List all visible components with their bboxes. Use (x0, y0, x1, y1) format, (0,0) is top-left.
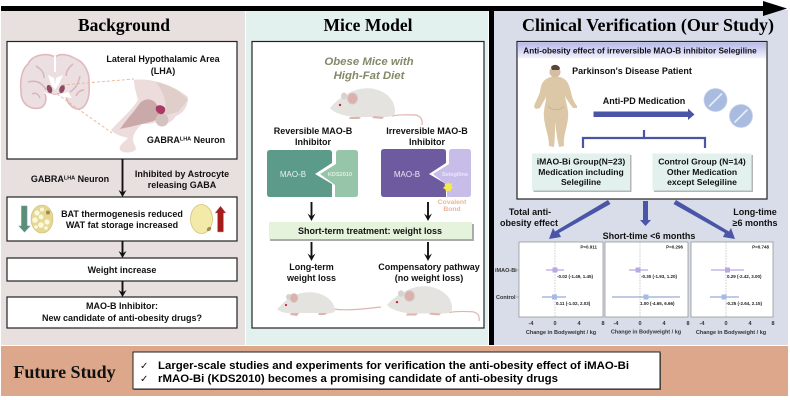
label: long-term: Long-term (289, 262, 334, 272)
label: inhibited by astrocyte: Inhibited by Astrocyte (135, 169, 229, 179)
arrow: medication (594, 108, 694, 120)
box: iMAO-Bi group: Selegiline (561, 177, 601, 187)
diagram: reversible inhibitor KDS2010: KDS2010 (328, 172, 352, 178)
forest plot: long-time: P=0.748 (752, 244, 769, 250)
box: iMAO-Bi group: Medication including (538, 167, 624, 177)
box: mice experiment (252, 42, 484, 328)
box: anti-obesity effect (517, 42, 767, 199)
label: GABRA LHA Neuron: Neuron (191, 135, 225, 145)
icon: patient figure (534, 65, 577, 147)
label: total effect: Total anti- (509, 207, 551, 217)
label: long-time: ≥6 months (733, 218, 777, 228)
forest plot: total: P=0.911 (580, 244, 597, 250)
box: control group (652, 154, 753, 192)
label: long-time (733, 207, 777, 228)
diagram: reversible inhibitor KDS2010: MAO-B (280, 170, 306, 179)
icon: coronal brain section (21, 55, 89, 109)
diagram: irreversible inhibitor Selegiline (381, 149, 471, 197)
box: brain anatomy (7, 42, 237, 159)
arrow: to long-time (674, 200, 735, 239)
label: covalent bond (438, 199, 467, 213)
label: covalent bond: Bond (443, 206, 461, 213)
arrow: to total effect (549, 200, 610, 239)
forest plot: total: Control (496, 295, 516, 301)
box: weight increase: Weight increase (88, 265, 156, 275)
arrow (118, 241, 126, 258)
forest plot: total: 4 (577, 321, 581, 327)
forest plot: total: 0.11 (-1.02, 2.03) (556, 301, 591, 306)
arrow (308, 242, 316, 261)
box: control group: except Selegiline (667, 177, 737, 187)
forest plot: long-time (691, 242, 775, 336)
forest plot: total (495, 242, 605, 336)
label: inhibited by astrocyte: releasing GABA (148, 180, 217, 190)
forest plot: total: -0.02 (-1.49, 1.45) (557, 274, 594, 279)
forest plot: total: iMAO-Bi (495, 268, 517, 274)
box: future study points (133, 352, 661, 390)
panel: mice model (246, 10, 488, 345)
forest plot: short-time: P=0.296 (666, 244, 683, 250)
forest plot: long-time: -0.25 (-2.64, 2.15) (726, 301, 763, 306)
label: Lateral Hypothalamic Area (106, 54, 221, 76)
forest plot: long-time: 0.29 (-2.42, 3.00) (727, 274, 762, 279)
box: future study points: rMAO-Bi (KDS2010) becomes a promising candidate of anti-obesity drugs (158, 373, 558, 385)
label: obese mice: Obese Mice with (324, 56, 414, 68)
arrow (118, 281, 126, 297)
forest plot: total: -4 (529, 321, 534, 327)
arrow: to short-time (640, 201, 651, 226)
box: thermogenesis (7, 197, 237, 241)
label: irreversible: Inhibitor (409, 137, 445, 147)
label: short-time: Short-time <6 months (603, 231, 695, 241)
diagram: reversible inhibitor KDS2010 (267, 150, 358, 197)
forest plot: long-time: 4 (748, 321, 752, 327)
text: thermogenesis (61, 209, 183, 230)
label: covalent bond: Covalent (438, 199, 467, 206)
label: compensatory: Compensatory pathway (378, 262, 480, 272)
label: anti-PD medication: Anti-PD Medication (603, 96, 685, 106)
forest plot: short-time: -0.30 (-1.93, 1.20) (641, 274, 678, 279)
label: compensatory (378, 262, 480, 283)
panel: clinical verification (489, 10, 788, 345)
label: long-term (286, 262, 336, 283)
label: Lateral Hypothalamic Area: (LHA) (151, 66, 175, 76)
band: short-term treatment (269, 222, 474, 241)
label: GABRA neuron: GABRA (31, 174, 64, 184)
diagram: irreversible inhibitor Selegiline: MAO-B (394, 170, 420, 179)
icon: pills (704, 88, 752, 128)
band: short-term treatment: Short-term treatment: weight loss (298, 226, 442, 236)
label: total effect (500, 207, 558, 228)
forest plot: short-time: 1.00 (-4.65, 6.66) (640, 301, 675, 306)
box: MAO-B inhibitor (7, 297, 237, 328)
label: obese mice (324, 56, 414, 82)
diagram: irreversible inhibitor Selegiline: Selegiline (442, 172, 468, 178)
forest plot: short-time: 4 (662, 321, 666, 327)
box: iMAO-Bi group: iMAO-Bi Group(N=23) (537, 156, 625, 166)
box: MAO-B inhibitor: MAO-B Inhibitor: (86, 301, 158, 311)
forest plot: long-time: 0 (724, 321, 728, 327)
label: reversible: Reversible MAO-B (274, 126, 353, 136)
timeline arrow (1, 1, 787, 16)
label: reversible (274, 126, 353, 147)
box: control group: Other Medication (667, 167, 737, 177)
forest plot: long-time: -4 (700, 321, 705, 327)
icon: red up arrow (215, 206, 226, 232)
box: weight increase (7, 258, 237, 281)
header: box title (518, 42, 766, 58)
header: box title: Anti-obesity effect of irreversible MAO-B inhibitor Selegiline (523, 46, 757, 56)
heading: Mice Model: Mice Model (324, 15, 413, 35)
label: irreversible: Irreversible MAO-B (386, 126, 468, 136)
icon: green down arrow (19, 206, 30, 232)
icon: obese mouse (330, 88, 422, 125)
arrow (308, 202, 316, 221)
dashed zoom guides (57, 79, 134, 133)
box: future study points: ✓ (140, 361, 148, 372)
label: GABRA neuron: LHA (64, 176, 75, 182)
icon: white fat cell (190, 204, 212, 234)
label: patient: Parkinson's Disease Patient (572, 66, 692, 76)
label: inhibited by astrocyte (135, 169, 229, 190)
forest plot: long-time: Change in Bodyweight / kg (696, 330, 766, 336)
label: GABRA LHA Neuron: LHA (180, 136, 191, 142)
label: reversible: Inhibitor (295, 137, 331, 147)
heading: Background: Background (78, 15, 170, 35)
panel: future study (1, 346, 788, 396)
label: obese mice: High-Fat Diet (334, 70, 406, 82)
arrow (424, 242, 432, 261)
forest plot: total: Change in Bodyweight / kg (526, 330, 596, 336)
icon: hypothalamus section (111, 80, 188, 153)
heading: Future Study: Future Study (13, 362, 116, 382)
label: GABRA neuron: Neuron (75, 174, 109, 184)
label: long-term: weight loss (286, 273, 336, 283)
forest plot: long-time: 8 (771, 321, 775, 327)
forest plot: short-time: 0 (638, 321, 642, 327)
box: future study points: Larger-scale studies and experiments for verification the anti-obesity effect of iMAO-Bi (158, 360, 629, 372)
icon: lean mouse (277, 292, 381, 316)
label: GABRA LHA Neuron: GABRA (147, 135, 180, 145)
text: thermogenesis: BAT thermogenesis reduced (61, 209, 183, 219)
text: thermogenesis: WAT fat storage increased (66, 220, 178, 230)
label: compensatory: (no weight loss) (395, 273, 463, 283)
label: long-time: Long-time (733, 207, 777, 217)
label: irreversible (386, 126, 468, 147)
forest plot: total: 8 (601, 321, 605, 327)
label: Lateral Hypothalamic Area: Lateral Hypothalamic Area (106, 54, 221, 64)
arrow (424, 202, 432, 221)
label: total effect: obesity effect (500, 218, 558, 228)
forest plot: total: 0 (553, 321, 557, 327)
heading: clinical verification: Clinical Verification (Our Study) (522, 15, 774, 35)
forest plot: short-time: Change in Bodyweight / kg (611, 330, 681, 336)
arrow: neuron to BAT/WAT (118, 159, 126, 197)
box: MAO-B inhibitor: New candidate of anti-obesity drugs? (42, 313, 202, 323)
panel: background (1, 10, 245, 345)
bracket: groups (583, 130, 705, 148)
forest plot: short-time: 8 (686, 321, 690, 327)
box: control group: Control Group (N=14) (658, 156, 746, 166)
forest plot: short-time (605, 242, 690, 336)
forest plot: short-time: -4 (614, 321, 619, 327)
icon: obese mouse after treatment (387, 286, 479, 321)
box: iMAO-Bi group (532, 154, 632, 192)
icon: brown fat cell (31, 205, 53, 233)
box: future study points: ✓ (140, 374, 148, 385)
